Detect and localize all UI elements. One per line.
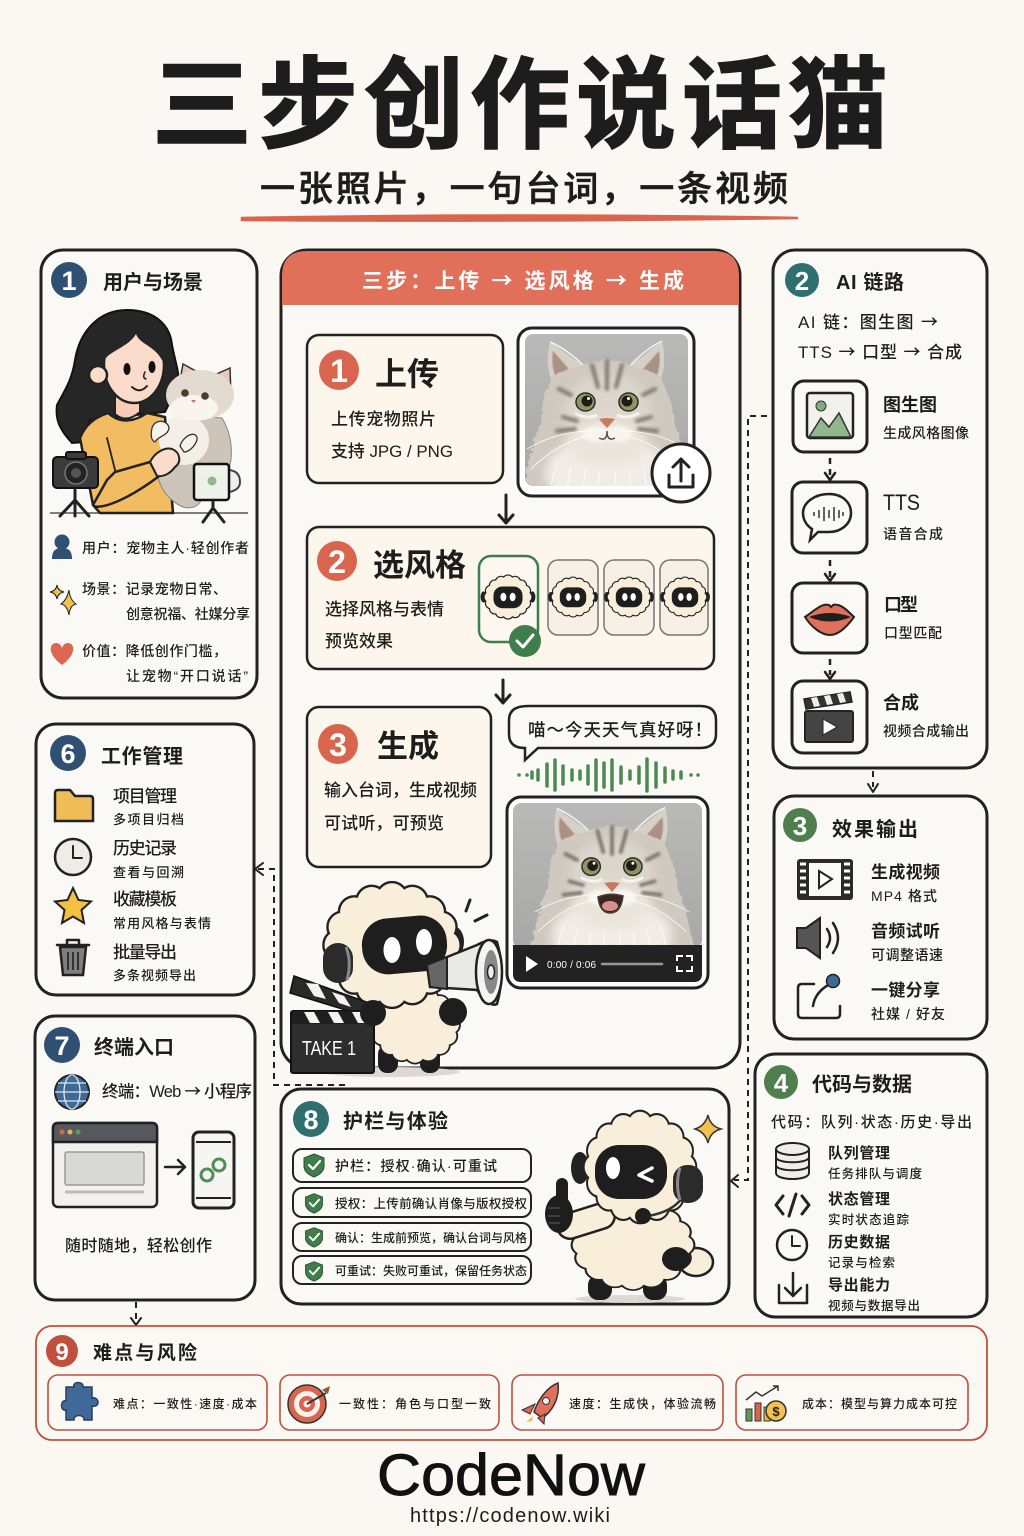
panel 6: work management [36, 724, 254, 995]
badge 6: 6 [60, 739, 76, 769]
header band: 三步：上传 → 选风格 → 生成 [362, 265, 684, 295]
icon: puzzle [62, 1382, 98, 1420]
favorites item: 常用风格与表情 [113, 916, 211, 931]
export: 视频与数据导出 [828, 1298, 920, 1313]
image-to-image label [883, 395, 969, 441]
share [871, 980, 945, 1022]
browser window [53, 1123, 157, 1207]
arrow [499, 495, 513, 523]
step text: 输入台词，生成视频 [324, 780, 477, 800]
icon: trash [57, 940, 89, 975]
badge 8: 8 [303, 1105, 319, 1135]
waveform [519, 759, 698, 791]
guard row 4: 可重试：失败可重试，保留任务状态 [335, 1262, 527, 1279]
history data [828, 1233, 895, 1270]
badge 9 [46, 1335, 78, 1367]
illustration: owner with cat [50, 310, 248, 513]
panel 7: entry points [35, 1016, 255, 1300]
badge [318, 724, 358, 764]
icon: film [797, 859, 853, 900]
badge: 3 [329, 727, 347, 763]
image-to-image label: 图生图 [883, 395, 937, 415]
lip label: 口型 [884, 595, 918, 615]
terminal text: 终端：Web → 小程序 [102, 1078, 252, 1102]
favorites item [113, 890, 211, 931]
card: speed: 速度：生成快，体验流畅 [569, 1395, 716, 1412]
output video: MP4 格式 [871, 888, 937, 904]
clapperboard [290, 976, 374, 1073]
badge 4: 4 [774, 1068, 789, 1098]
queue [828, 1144, 922, 1181]
badge 4 [764, 1065, 798, 1099]
icon: rocket [522, 1383, 558, 1424]
share: 社媒 / 好友 [871, 1006, 945, 1022]
code text: 代码：队列·状态·历史·导出 [771, 1111, 972, 1132]
project item: 项目管理 [113, 787, 177, 806]
cat held in arms [151, 364, 234, 508]
icon: export [779, 1273, 807, 1303]
connector: center to panel 6 dashed [255, 863, 345, 1085]
guard row 2: 授权：上传前确认肖像与版权授权 [335, 1193, 527, 1212]
speech bubble [509, 706, 716, 760]
chain text: TTS → 口型 → 合成 [798, 338, 962, 363]
badge 1: 1 [61, 266, 77, 296]
badge 2: 2 [795, 266, 809, 296]
guard row 4 [293, 1256, 531, 1284]
share: 一键分享 [871, 980, 940, 1000]
icon: phone on tripod [194, 464, 240, 522]
arrow [825, 560, 835, 581]
url: https://codenow.wiki [410, 1505, 610, 1527]
scene row: 创意祝福、社媒分享 [126, 606, 250, 622]
style option 4 [660, 560, 710, 635]
card: speed [512, 1375, 723, 1430]
step title: 上传 [375, 356, 439, 392]
lip label: 口型匹配 [884, 625, 942, 641]
TTS label: 语音合成 [883, 526, 943, 542]
scene row [50, 579, 250, 622]
history item: 查看与回溯 [113, 865, 184, 880]
title underline [242, 216, 798, 221]
video player [507, 797, 708, 988]
TTS icon [792, 482, 867, 553]
scene row: 场景：记录宠物日常、 [82, 579, 227, 599]
badge: 2 [328, 544, 346, 580]
compose label [883, 692, 969, 739]
step text [331, 410, 453, 461]
mascot: thumbs-up sheep [545, 1112, 713, 1303]
value row: 让宠物“开口说话” [126, 668, 248, 684]
card: difficulty [48, 1375, 267, 1430]
heading: 护栏与体验 [343, 1109, 448, 1133]
output video [871, 862, 940, 904]
icon: star [55, 888, 91, 923]
badge 1 [51, 262, 87, 298]
badge 2 [785, 263, 819, 297]
badge [319, 350, 359, 390]
state [828, 1190, 909, 1227]
panel 9: difficulties and risks [36, 1326, 987, 1440]
badge 7: 7 [54, 1031, 70, 1061]
arrow [496, 680, 510, 703]
panel 3: outputs [774, 796, 987, 1039]
icon: history clock [777, 1230, 807, 1260]
badge 3: 3 [793, 811, 807, 841]
guard row 3 [293, 1223, 531, 1251]
lips icon [792, 583, 867, 653]
step 3 box [307, 707, 491, 867]
icon: chart and coin [746, 1386, 786, 1421]
arrow: 7 to 9 [131, 1302, 141, 1325]
audio preview [871, 921, 943, 963]
step text: 上传宠物照片 [331, 410, 436, 429]
user row [52, 534, 249, 559]
value row: 价值：降低创作门槛， [82, 641, 227, 661]
icon: camera on tripod [53, 452, 98, 516]
card: consistency: 一致性：角色与口型一致 [339, 1395, 491, 1412]
style option 3 [604, 560, 654, 635]
heading: 难点与风险 [93, 1341, 197, 1364]
panel 4: code and data [755, 1054, 987, 1317]
chain text: AI 链：图生图 → [798, 308, 938, 333]
queue: 队列管理 [828, 1144, 890, 1162]
logo: CodeNow [377, 1443, 646, 1508]
badge 9: 9 [55, 1339, 69, 1366]
clapperboard: TAKE 1 [302, 1038, 356, 1060]
header band [282, 251, 739, 305]
arrow: 2 to 3 [868, 771, 878, 792]
compose label: 视频合成输出 [883, 723, 969, 739]
step 2 box [307, 527, 714, 669]
icon: upload button [652, 444, 710, 502]
icon: sparkle [695, 1115, 721, 1143]
phone [193, 1132, 234, 1208]
style option 2 [548, 560, 598, 635]
speech bubble: 喵～今天天气真好呀！ [528, 720, 712, 740]
icon: speaker [797, 918, 838, 958]
step text: 支持 JPG / PNG [331, 442, 453, 461]
image-to-image label: 生成风格图像 [883, 425, 969, 441]
icon: globe [55, 1075, 89, 1109]
export [828, 1276, 920, 1313]
TTS label [883, 490, 943, 542]
audio preview: 音频试听 [871, 921, 940, 941]
queue: 任务排队与调度 [828, 1166, 922, 1181]
card: consistency [280, 1375, 499, 1430]
favorites item: 收藏模板 [113, 890, 177, 909]
icon: chart and coin: $ [772, 1404, 780, 1419]
compose icon [792, 681, 867, 753]
guard row 3: 确认：生成前预览，确认台词与风格 [335, 1229, 527, 1246]
badge 3 [783, 808, 817, 842]
history data: 记录与检索 [828, 1255, 895, 1270]
step text: 预览效果 [325, 632, 393, 651]
heading: AI 链路 [836, 271, 904, 294]
caption: 随时随地，轻松创作 [65, 1237, 212, 1255]
guard row 1: 护栏：授权·确认·可重试 [335, 1156, 497, 1176]
user row: 用户：宠物主人·轻创作者 [82, 538, 249, 558]
TTS label: TTS [883, 490, 920, 515]
batch export item: 批量导出 [113, 943, 177, 962]
arrow [825, 659, 835, 679]
uploaded cat photo [518, 328, 694, 511]
icon: target [288, 1385, 330, 1423]
video player: 0:00 / 0:06 [547, 960, 596, 971]
heading: 代码与数据 [812, 1073, 912, 1096]
card: cost: 成本：模型与算力成本可控 [802, 1395, 957, 1412]
value row [51, 641, 248, 684]
heading: 终端入口 [94, 1036, 174, 1059]
image-to-image icon [793, 381, 867, 452]
chain text [798, 308, 962, 363]
connector: panel 2 to panel 4 dashed [731, 411, 782, 1187]
step text [324, 780, 477, 833]
icon: share [798, 974, 840, 1018]
panel 1: users and scenes [41, 250, 257, 698]
project item: 多项目归档 [113, 812, 184, 827]
mascot: sheep with megaphone and clapper [290, 883, 502, 1077]
arrow [165, 1160, 185, 1174]
history item [113, 839, 184, 880]
project item [113, 787, 184, 827]
panel 8: guardrails and experience [281, 1089, 729, 1304]
arrow [825, 458, 835, 480]
history item: 历史记录 [113, 839, 177, 858]
badge 6 [50, 735, 86, 771]
step text [325, 600, 444, 651]
step 1 box [307, 335, 503, 483]
center panel: three steps [281, 250, 740, 1077]
badge: 1 [330, 353, 348, 389]
export: 导出能力 [828, 1276, 890, 1294]
badge 7 [44, 1027, 80, 1063]
style option selected [479, 556, 541, 657]
card: difficulty: 难点：一致性·速度·成本 [113, 1395, 257, 1412]
heading: 用户与场景 [103, 270, 203, 294]
icon: folder [55, 790, 93, 821]
guard row 2 [293, 1188, 531, 1217]
history data: 历史数据 [828, 1233, 890, 1251]
step title: 生成 [377, 729, 439, 764]
heading: 工作管理 [101, 745, 183, 768]
subtitle: 一张照片，一句台词，一条视频 [260, 170, 788, 209]
guard row 1 [293, 1149, 531, 1182]
panel 2: AI chain [773, 250, 987, 768]
badge [317, 541, 357, 581]
title: 三步创作说话猫 [152, 50, 888, 162]
state: 实时状态追踪 [828, 1212, 909, 1227]
icon: database [776, 1143, 809, 1179]
step text: 可试听，可预览 [324, 814, 444, 833]
lip label [884, 595, 942, 641]
card: cost [736, 1375, 968, 1430]
audio preview: 可调整语速 [871, 947, 943, 963]
batch export item [113, 943, 196, 983]
step title: 选风格 [373, 548, 466, 583]
compose label: 合成 [883, 692, 919, 713]
badge 8 [293, 1101, 329, 1137]
output video: 生成视频 [871, 862, 940, 882]
step text: 选择风格与表情 [325, 600, 444, 619]
state: 状态管理 [828, 1190, 890, 1208]
batch export item: 多条视频导出 [113, 968, 196, 983]
icon: code [776, 1194, 809, 1216]
heading: 效果输出 [832, 818, 918, 841]
icon: clock [55, 839, 91, 875]
